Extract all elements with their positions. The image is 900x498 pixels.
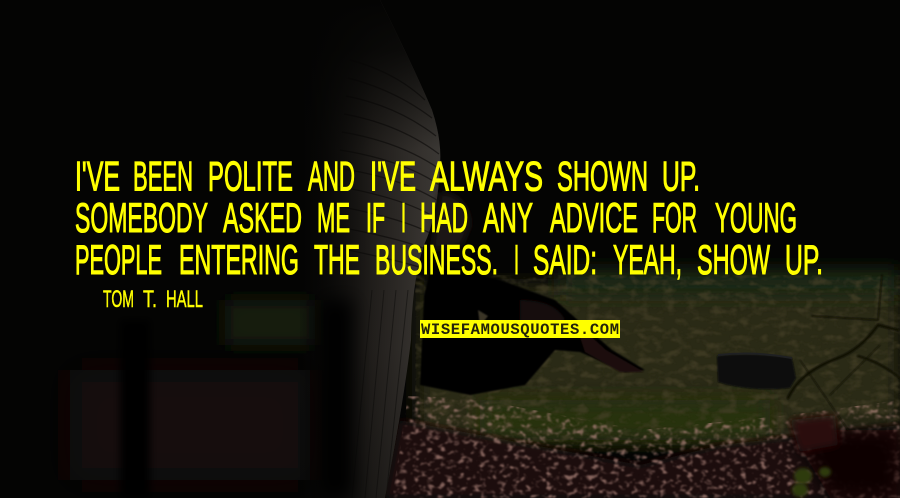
quote line 1: AND xyxy=(308,152,355,200)
curved brick wall xyxy=(336,8,440,498)
quote line 2: IF xyxy=(366,194,385,241)
quote line 1: BEEN xyxy=(133,152,193,200)
quote line 1: POLITE xyxy=(208,152,293,200)
seated person xyxy=(420,192,645,395)
faint litter on left xyxy=(70,300,315,498)
quote line 2: YOUNG xyxy=(715,194,797,241)
tree trunk in foreground xyxy=(320,300,352,498)
quote line 3: THE xyxy=(314,236,360,283)
quote line 2: ME xyxy=(317,194,350,241)
tree stump xyxy=(717,354,796,389)
quote line 1: I'VE xyxy=(75,152,120,200)
quote line 3: YEAH, xyxy=(613,236,682,283)
quote text xyxy=(75,152,823,283)
quote line 1: I'VE xyxy=(370,152,416,200)
quote line 2: I xyxy=(401,194,406,241)
author attribution: T. xyxy=(143,286,157,313)
quote line 2: FOR xyxy=(652,194,697,241)
quote line 2: HAD xyxy=(420,194,468,241)
quote line 2 xyxy=(75,194,797,241)
quote line 3: PEOPLE xyxy=(75,236,162,283)
quote line 3: BUSINESS. xyxy=(375,236,498,283)
quote line 1: SHOWN xyxy=(557,152,648,200)
fallen leaves on the ground xyxy=(385,396,900,498)
watermark badge: WISEFAMOUSQUOTES.COM xyxy=(421,321,619,339)
quote line 2: SOMEBODY xyxy=(75,194,208,241)
quote line 3: SAID: xyxy=(533,236,597,283)
quote line 3: UP. xyxy=(785,236,823,283)
author attribution xyxy=(103,286,203,313)
author attribution: HALL xyxy=(166,286,203,313)
quote line 2: ASKED xyxy=(223,194,302,241)
quote line 3: I xyxy=(514,236,519,283)
quote line 2: ANY xyxy=(483,194,533,241)
quote line 1 xyxy=(75,152,700,200)
author attribution: TOM xyxy=(103,286,134,313)
quote line 3 xyxy=(75,236,823,283)
quote line 3: SHOW xyxy=(697,236,770,283)
bare branches xyxy=(788,275,900,430)
quote line 1: ALWAYS xyxy=(430,152,543,200)
quote line 2: ADVICE xyxy=(550,194,638,241)
distant grass field xyxy=(415,270,900,445)
quote line 1: UP. xyxy=(662,152,700,200)
quote line 3: ENTERING xyxy=(179,236,299,283)
